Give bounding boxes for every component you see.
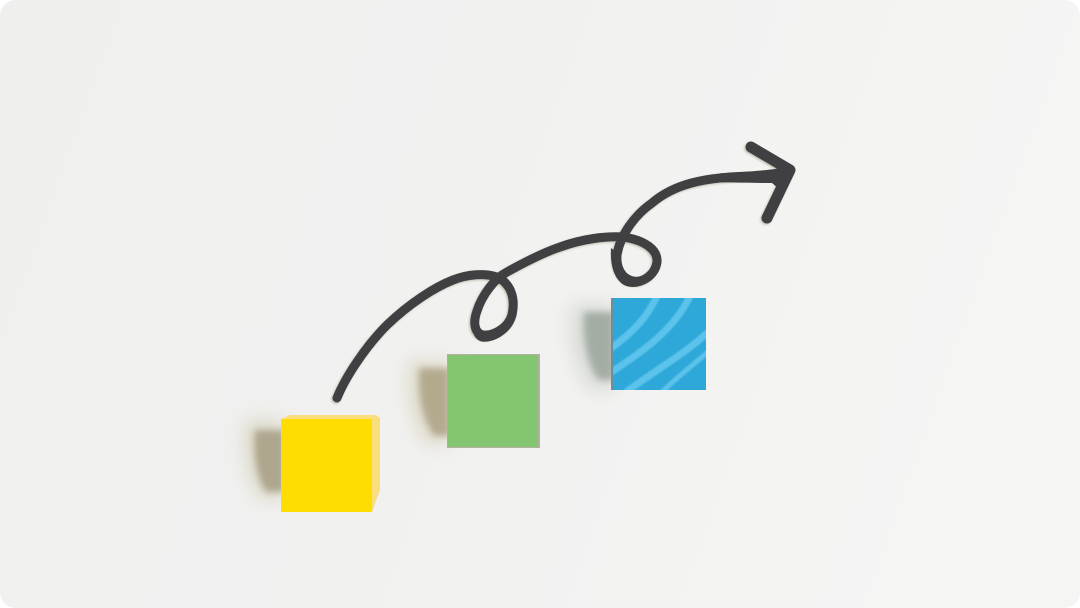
arrow head bbox=[751, 147, 790, 218]
green block bbox=[407, 354, 540, 448]
green block face bbox=[448, 355, 538, 447]
blue block shadow bbox=[584, 312, 615, 380]
yellow block shadow bbox=[254, 430, 285, 492]
first loop thick base bbox=[472, 290, 517, 342]
green block shadow bbox=[419, 368, 450, 436]
green block soft shadow bbox=[407, 360, 450, 445]
blue block soft shadow bbox=[571, 305, 615, 390]
arrow shadow bbox=[336, 148, 789, 399]
yellow block soft shadow bbox=[244, 420, 285, 500]
arrow shaft taper and head junction bbox=[720, 166, 790, 190]
green block side bbox=[447, 354, 540, 448]
blue block bbox=[571, 296, 708, 392]
blue block edge bbox=[611, 298, 706, 390]
blue block face bbox=[613, 298, 706, 390]
blue block wood grain bbox=[610, 296, 708, 392]
second loop thick base bbox=[611, 247, 661, 287]
arrow bbox=[336, 147, 790, 399]
yellow block side bbox=[281, 415, 380, 512]
arrow body with loops bbox=[337, 176, 760, 398]
yellow block face bbox=[281, 419, 372, 512]
yellow block bbox=[244, 415, 380, 512]
